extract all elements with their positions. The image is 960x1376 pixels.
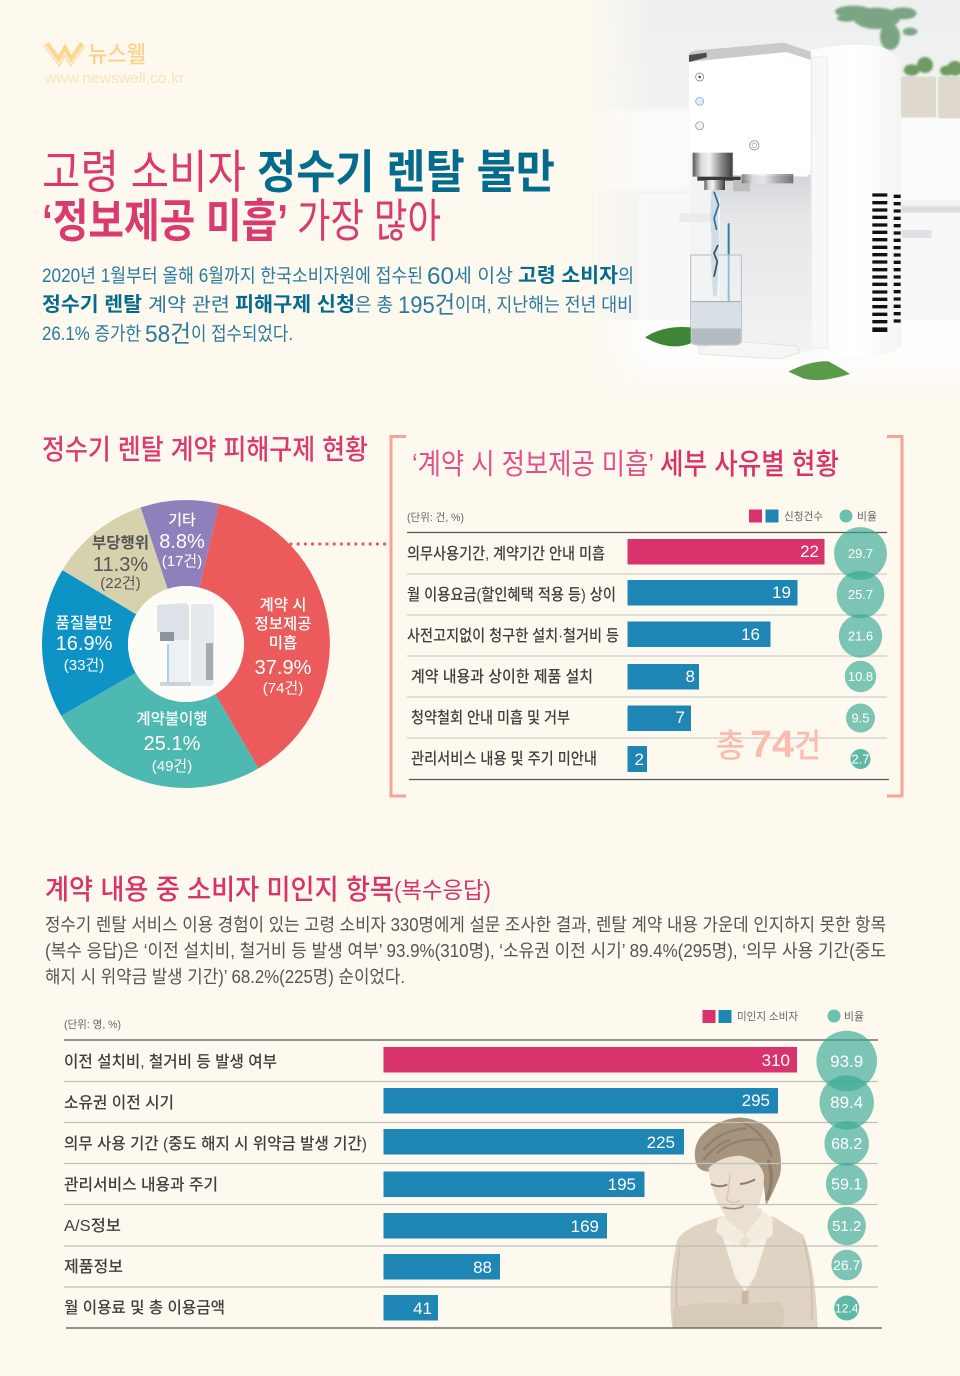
label: 품질불만: (33건) <box>64 657 104 674</box>
vent slats <box>872 193 901 332</box>
survey paragraph <box>45 915 886 987</box>
row: 이전 설치비 <box>64 1031 877 1091</box>
row: A/S정보: 169 <box>571 1217 599 1236</box>
glass of water <box>691 255 741 345</box>
survey paragraph: (복수 응답)은 ‘이전 설치비, 철거비 등 발생 여부’ 93.9%(310명), ‘소유권 이전 시기’ 89.4%(295명), ‘의무 사용 기간(중도 <box>45 941 886 961</box>
label: 계약불이행: 25.1% <box>144 733 201 755</box>
intro paragraph: 의 <box>618 265 634 287</box>
panel brackets <box>391 436 902 796</box>
title: 가장 많아 <box>297 195 441 247</box>
label: 계약 시 정보제공 미흡: 미흡 <box>269 634 297 652</box>
row 6: 2 <box>635 750 644 769</box>
row: A/S정보: A/S정보 <box>64 1217 121 1235</box>
label: 계약 시 정보제공 미흡: 정보제공 <box>254 615 312 633</box>
row: 관리서비스 내용과 주기: 195 <box>608 1175 636 1194</box>
row 1 <box>407 527 887 580</box>
logo wordmark: 뉴스웰 <box>88 41 146 67</box>
photo: kitchen background with water purifier <box>622 0 960 380</box>
label: 기타: 8.8% <box>159 531 205 553</box>
row: A/S정보: 51.2 <box>832 1218 861 1235</box>
water stream <box>710 190 721 297</box>
row 4 <box>411 661 876 692</box>
kitchen backdrop <box>622 0 960 370</box>
row 1: 29.7 <box>848 546 873 561</box>
intro paragraph: 은 총 <box>355 294 393 316</box>
row: 의무 사용 기간 <box>64 1121 869 1166</box>
row: 소유권 이전 시기: 소유권 이전 시기 <box>64 1094 174 1112</box>
row 4: 계약 내용과 상이한 제품 설치 <box>411 668 593 686</box>
label: 부당행위: (22건) <box>100 575 141 592</box>
total watermark: 74 <box>750 724 794 766</box>
row: 이전 설치비: 310 <box>762 1051 790 1070</box>
slice: 계약 시 정보제공 미흡 <box>199 504 330 768</box>
title <box>42 146 555 247</box>
row: 소유권 이전 시기: 295 <box>742 1091 770 1110</box>
tank body <box>812 45 902 357</box>
drip tray <box>699 342 800 359</box>
label: 부당행위: 부당행위 <box>92 534 149 552</box>
label: 부당행위: 11.3% <box>93 554 148 576</box>
row 5: 청약철회 안내 미흡 및 거부 <box>411 709 570 727</box>
logo url: www.newswell.co.kr <box>44 70 184 87</box>
row: 소유권 이전 시기: 89.4 <box>830 1093 863 1112</box>
legend: 신청건수 <box>784 510 823 523</box>
label: 기타: 기타 <box>168 512 196 529</box>
slice: 계약불이행 <box>61 673 259 788</box>
label: 부당행위 <box>92 534 149 592</box>
row 3: 21.6 <box>848 628 873 644</box>
slice: 부당행위 <box>62 507 168 614</box>
row: 관리서비스 내용과 주기: 관리서비스 내용과 주기 <box>64 1176 218 1194</box>
row 6: 2.7 <box>851 752 870 766</box>
panel heading <box>412 448 839 481</box>
label: 기타: (17건) <box>162 553 202 570</box>
logo mark: W <box>44 44 85 64</box>
slice: 기타 <box>141 500 219 589</box>
water purifier <box>645 43 902 380</box>
intro paragraph: 계약 관련 <box>148 294 230 316</box>
row 2 <box>407 571 884 618</box>
intro paragraph: 고령 소비자 <box>518 264 618 287</box>
spout <box>693 153 733 177</box>
row 5: 9.5 <box>851 710 870 726</box>
dotted connector <box>291 542 390 546</box>
row 6: 관리서비스 내용 및 주기 미안내 <box>411 750 597 768</box>
row: 의무 사용 기간: 의무 사용 기간 (중도 해지 시 위약금 발생 기간) <box>64 1135 367 1153</box>
leaves <box>645 327 691 346</box>
legend <box>702 1010 864 1023</box>
row: 월 이용료: 41 <box>413 1299 432 1318</box>
title: ‘정보제공 미흡’ <box>42 195 288 247</box>
total watermark <box>716 724 821 766</box>
row: 의무 사용 기간: 68.2 <box>831 1136 862 1153</box>
row: 제품정보 <box>64 1250 862 1280</box>
row 5: 7 <box>676 708 685 727</box>
panel heading: ‘계약 시 정보제공 미흡’ <box>412 448 654 481</box>
row: 의무 사용 기간: 225 <box>647 1133 675 1152</box>
survey paragraph: 정수기 렌탈 서비스 이용 경험이 있는 고령 소비자 330명에게 설문 조사한 결과, 렌탈 계약 내용 가운데 인지하지 못한 항목 <box>45 915 886 935</box>
row: 이전 설치비: 이전 설치비, 철거비 등 발생 여부 <box>64 1053 277 1071</box>
hair <box>695 1117 781 1205</box>
row 5 <box>411 704 875 732</box>
row 6 <box>411 746 870 772</box>
legend: 비율 <box>844 1010 864 1023</box>
icon: small water purifier <box>157 603 214 686</box>
row: 소유권 이전 시기 <box>64 1075 874 1130</box>
row: 제품정보: 88 <box>473 1258 492 1277</box>
label: 계약 시 정보제공 미흡 <box>254 596 312 697</box>
row 2: 25.7 <box>848 587 873 602</box>
table rules <box>64 1040 882 1328</box>
total watermark: 총 <box>716 727 745 764</box>
row 2: 19 <box>772 583 791 602</box>
row: 제품정보: 제품정보 <box>64 1258 123 1276</box>
intro paragraph: 60 <box>427 263 454 290</box>
row 3 <box>407 614 882 658</box>
lower back panel <box>720 175 811 352</box>
intro paragraph: 이 접수되었다. <box>191 323 293 345</box>
neck <box>723 1208 764 1248</box>
panel: detail reasons <box>391 436 902 796</box>
legend <box>749 510 877 523</box>
illustration: worried senior woman <box>670 1117 818 1327</box>
intro paragraph <box>42 263 634 348</box>
label: 품질불만 <box>55 614 113 674</box>
donut chart <box>42 500 330 788</box>
label: 기타 <box>159 512 205 570</box>
row: 관리서비스 내용과 주기 <box>64 1163 868 1205</box>
table rules <box>407 532 889 780</box>
control buttons <box>696 73 704 81</box>
heading: unaware items: 계약 내용 중 소비자 미인지 항목 <box>45 874 394 905</box>
logo <box>44 41 184 87</box>
row: 월 이용료 <box>64 1295 859 1320</box>
intro paragraph: 피해구제 신청 <box>235 293 355 316</box>
slice: 품질불만 <box>42 570 136 716</box>
title: 정수기 렌탈 불만 <box>257 146 555 198</box>
intro paragraph: 이며, 지난해는 전년 대비 <box>455 294 633 316</box>
label: 계약 시 정보제공 미흡: 37.9% <box>255 657 312 679</box>
pots <box>901 77 936 117</box>
blue level line <box>728 223 730 317</box>
label: 계약불이행: 계약불이행 <box>136 710 208 728</box>
row: 제품정보: 26.7 <box>833 1257 861 1273</box>
label: 품질불만: 품질불만 <box>55 614 113 632</box>
intro paragraph: 26.1% 증가한 <box>42 323 141 345</box>
row 3: 16 <box>741 625 760 644</box>
row: A/S정보 <box>64 1207 866 1245</box>
survey paragraph: 해지 시 위약금 발생 기간)’ 68.2%(225명) 순이었다. <box>45 967 405 987</box>
heading: unaware items: (복수응답) <box>394 877 491 903</box>
label: 계약불이행 <box>136 710 208 775</box>
face <box>708 1156 764 1220</box>
label: 계약 시 정보제공 미흡: (74건) <box>263 680 303 697</box>
row: 월 이용료: 월 이용료 및 총 이용금액 <box>64 1299 225 1317</box>
row: 월 이용료: 12.4 <box>835 1302 859 1316</box>
intro paragraph: 195건 <box>398 292 455 319</box>
row 1: 22 <box>800 542 819 561</box>
label: 계약불이행: (49건) <box>152 758 192 775</box>
center hole <box>128 586 244 702</box>
intro paragraph: 2020년 1월부터 올해 6월까지 한국소비자원에 접수된 <box>42 265 423 287</box>
row 2: 월 이용요금(할인혜택 적용 등) 상이 <box>407 586 616 604</box>
row: 관리서비스 내용과 주기: 59.1 <box>831 1176 862 1194</box>
panel heading: 세부 사유별 현황 <box>660 448 839 481</box>
chart: unaware items <box>64 1010 882 1328</box>
cardigan <box>670 1217 818 1327</box>
row: 이전 설치비: 93.9 <box>830 1052 863 1071</box>
label: 계약 시 정보제공 미흡: 계약 시 <box>259 596 307 614</box>
title: 고령 소비자 <box>42 146 246 198</box>
head <box>689 52 811 177</box>
collar <box>716 1212 773 1247</box>
legend: 미인지 소비자 <box>737 1010 798 1023</box>
heading: donut chart: 정수기 렌탈 계약 피해구제 현황 <box>42 434 368 465</box>
label: 품질불만: 16.9% <box>56 633 113 655</box>
intro paragraph: 세 이상 <box>454 265 513 287</box>
crossed arms <box>673 1302 785 1327</box>
intro paragraph: 58건 <box>145 321 191 348</box>
row 4: 8 <box>686 667 695 686</box>
row 4: 10.8 <box>848 669 873 684</box>
eyes and mouth <box>711 1179 755 1186</box>
row 1: 의무사용기간, 계약기간 안내 미흡 <box>407 545 605 563</box>
total watermark: 건 <box>794 727 821 764</box>
unit note: (단위: 건, %) <box>407 511 464 524</box>
unit note: (단위: 명, %) <box>64 1018 121 1031</box>
legend: 비율 <box>857 510 877 523</box>
plants <box>904 57 960 76</box>
row 3: 사전고지없이 청구한 설치·철거비 등 <box>407 627 619 645</box>
intro paragraph: 정수기 렌탈 <box>42 293 142 316</box>
